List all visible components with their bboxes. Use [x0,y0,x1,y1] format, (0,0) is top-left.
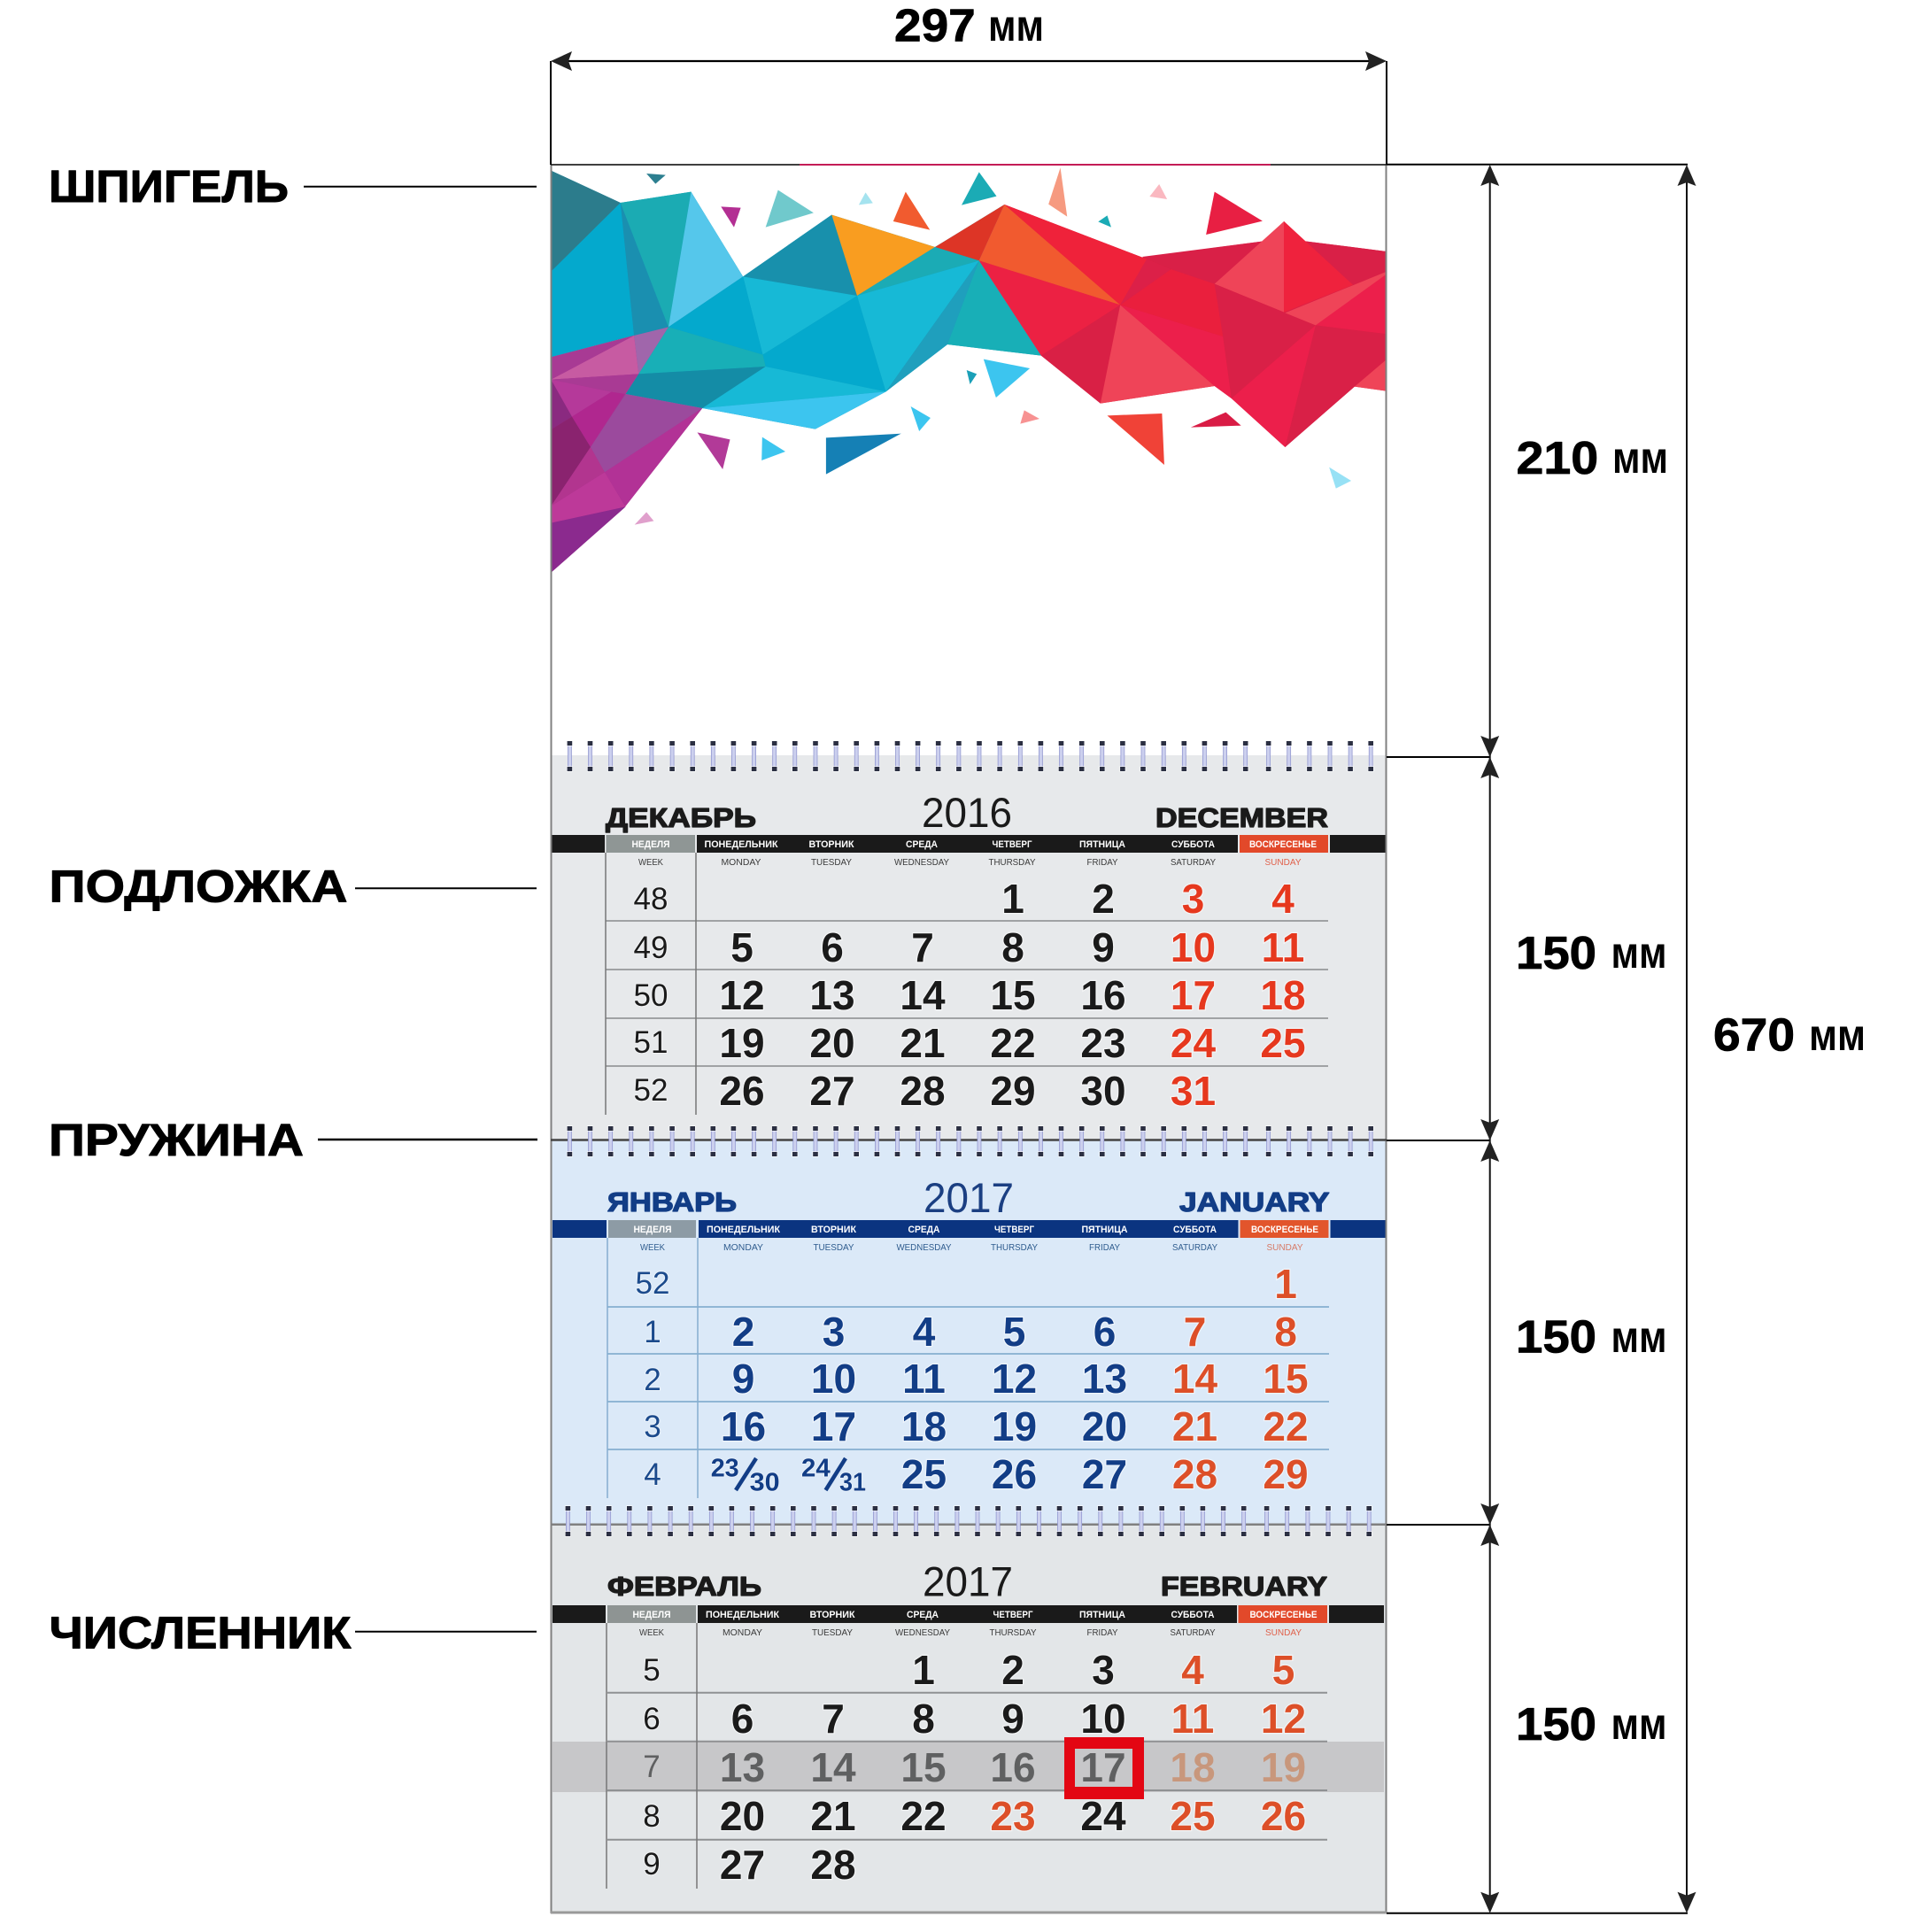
dates: 1 [912,1647,935,1693]
dates: 14 [1172,1356,1217,1402]
dates: 21 [1172,1403,1217,1449]
dates: 13 [1082,1356,1127,1402]
weekday sub-labels: WEDNESDAY [895,1628,950,1638]
dates: 4 [1181,1647,1204,1693]
dimension label: 150 mm January [1516,1312,1666,1364]
weekday sub-labels: TUESDAY [811,858,852,868]
grid lines [607,1238,1329,1498]
dimension label: 150 mm February: 150 [1516,1699,1596,1750]
dates: 24 [801,1454,831,1482]
weekday header bar: ВТОРНИК [809,839,854,850]
weekday header bar: ВТОРНИК [809,1610,855,1620]
dates: 7 [911,924,934,970]
dimension: width 297 mm: 297 [894,1,976,52]
heading: FEBRUARY: FEBRUARY [1161,1571,1327,1602]
dates: 28 [1172,1451,1217,1497]
dates: 20 [1082,1403,1127,1449]
dates: 8 [912,1696,935,1742]
dates: 2 [1001,1647,1024,1693]
dimension: width 297 mm [551,1,1387,165]
dates: 15 [1263,1356,1309,1402]
weekday sub-labels [639,1628,1302,1638]
weekday header bar: СРЕДА [908,1225,940,1235]
week numbers: 2 [644,1363,661,1397]
dates: 1 [1274,1261,1297,1307]
dates: 12 [992,1356,1037,1402]
dates: 26 [719,1068,765,1114]
weekday header bar: ПОНЕДЕЛЬНИК [705,839,778,850]
dates: 29 [990,1068,1036,1114]
panel: February [551,1526,1387,1913]
week numbers: 1 [644,1315,661,1349]
dates: 21 [900,1020,946,1066]
dimension label: 150 mm December: 150 [1516,928,1596,979]
dates: 25 [1170,1793,1216,1839]
dates: 3 [823,1309,845,1355]
dimension label: 150 mm February: мм [1611,1699,1666,1749]
week numbers: 3 [644,1410,661,1444]
panel: December [551,755,1387,1140]
dates: 31 [1171,1068,1216,1114]
dates: 27 [720,1842,765,1888]
weekday sub-labels: THURSDAY [991,1243,1038,1253]
dates: 4 [1271,876,1294,922]
dates: 24 [1080,1793,1126,1839]
weekday sub-labels: FRIDAY [1087,858,1118,868]
dates: 6 [731,1696,753,1742]
dates: 16 [1080,972,1126,1018]
spring: December binding [567,740,1374,772]
weekday sub-labels: SATURDAY [1171,858,1216,868]
dimension label: 150 mm January: 150 [1516,1312,1596,1364]
dates: 18 [1170,1744,1216,1790]
dates: 4 [913,1309,936,1355]
weekday sub-labels: SATURDAY [1172,1243,1217,1253]
weekday sub-labels: WEEK [638,858,663,868]
dimension label: 150 mm December: мм [1611,928,1666,978]
weekday header bar [553,1220,1385,1238]
weekday header bar: ПЯТНИЦА [1079,1610,1125,1620]
week numbers: 52 [634,1073,668,1108]
dates: 12 [719,972,765,1018]
dates: 1 [1001,876,1024,922]
dates: 11 [902,1356,946,1402]
week numbers: 50 [634,978,668,1013]
dates: 21 [810,1793,856,1839]
red date marker [1064,1737,1144,1799]
weekday sub-labels: TUESDAY [813,1243,854,1253]
weekday sub-labels: WEDNESDAY [896,1243,952,1253]
dates: 24 [1171,1020,1216,1066]
dates: 22 [1263,1403,1309,1449]
dates: 20 [720,1793,765,1839]
dates: 3 [1182,876,1204,922]
weekday header bar: ПЯТНИЦА [1082,1225,1128,1235]
weekday sub-labels [640,1243,1303,1253]
heading: ФЕВРАЛЬ: ФЕВРАЛЬ [607,1571,761,1602]
week numbers: 6 [643,1702,661,1736]
dates: 10 [811,1356,856,1402]
weekday header bar: НЕДЕЛЯ [634,1225,672,1235]
callout: ЧИСЛЕННИК: ЧИСЛЕННИК [50,1608,352,1658]
heading: DECEMBER: DECEMBER [1155,802,1328,833]
week numbers: 51 [634,1025,668,1060]
grid lines [606,853,1328,1115]
dates: 8 [1001,924,1024,970]
dates: 26 [1261,1793,1306,1839]
dates: 27 [1082,1451,1127,1497]
panel: header art (шпигель) [553,168,1385,572]
weekday header bar: СУББОТА [1173,1225,1217,1235]
dates: 11 [1171,1696,1214,1742]
weekday header bar: ВОСКРЕСЕНЬЕ [1249,839,1317,850]
heading: ЯНВАРЬ: ЯНВАРЬ [607,1186,737,1217]
callout: ПРУЖИНА: ПРУЖИНА [49,1115,304,1165]
weekday sub-labels: SUNDAY [1265,1628,1302,1638]
dates: 9 [1001,1696,1024,1742]
week numbers: 8 [643,1799,661,1834]
dates: 10 [1080,1696,1126,1742]
dates: 26 [992,1451,1037,1497]
week numbers: 48 [634,882,668,916]
callout: ПОДЛОЖКА: ПОДЛОЖКА [50,861,347,911]
heading: year 2016: 2016 [922,789,1012,836]
weekday header bar: СУББОТА [1171,839,1215,850]
weekday header bar [551,835,1386,853]
weekday header bar: НЕДЕЛЯ [632,1610,671,1620]
dates: 15 [900,1744,947,1790]
weekday sub-labels: TUESDAY [812,1628,853,1638]
weekday sub-labels: SUNDAY [1266,1243,1303,1253]
weekday sub-labels: MONDAY [723,1243,763,1253]
panel frame [551,165,1387,1913]
dates: 30 [750,1468,780,1496]
heading: year 2017: 2017 [923,1558,1013,1604]
dates: 29 [1263,1451,1309,1497]
dates: 23 [1080,1020,1126,1066]
dimension label: 210 mm [1516,433,1668,484]
week numbers: 9 [643,1847,661,1882]
dates: 28 [810,1842,856,1888]
dates: 12 [1261,1696,1306,1742]
dates [720,1647,1306,1888]
dimension label: 670 mm total [1713,1010,1866,1062]
weekday header bar: ВОСКРЕСЕНЬЕ [1250,1610,1318,1620]
weekday header bar: ЧЕТВЕРГ [994,1225,1035,1235]
weekday header bar: НЕДЕЛЯ [632,839,670,850]
dates: 20 [809,1020,855,1066]
weekday sub-labels: FRIDAY [1089,1243,1120,1253]
dates: 16 [990,1744,1036,1790]
weekday header bar: ЧЕТВЕРГ [992,839,1032,850]
dates: 7 [1184,1309,1206,1355]
weekday header bar: ПОНЕДЕЛЬНИК [706,1610,779,1620]
dates: 27 [809,1068,855,1114]
weekday sub-labels: SUNDAY [1264,858,1302,868]
weekday header bar: СРЕДА [907,1610,939,1620]
dates: 10 [1171,924,1216,970]
dates [719,876,1306,1114]
weekday header bar: ВОСКРЕСЕНЬЕ [1251,1225,1318,1235]
dates: 23 [711,1454,739,1482]
grid lines [607,1623,1327,1889]
dates: 13 [809,972,855,1018]
weekday header bar: ПЯТНИЦА [1079,839,1125,850]
week numbers [643,1653,661,1882]
dates: 13 [720,1744,765,1790]
weekday sub-labels: THURSDAY [988,858,1036,868]
dimension label: 150 mm February [1516,1699,1666,1750]
dates: 30 [1080,1068,1126,1114]
dates: 18 [901,1403,947,1449]
dates: 6 [821,924,844,970]
weekday sub-labels: MONDAY [723,1628,762,1638]
dates: 9 [1092,924,1115,970]
dates: 18 [1260,972,1306,1018]
dates: 14 [810,1744,856,1790]
dates: 28 [900,1068,946,1114]
heading: ДЕКАБРЬ: ДЕКАБРЬ [606,802,756,833]
dates: 2 [1092,876,1115,922]
weekday sub-labels: MONDAY [721,858,761,868]
dates: 23 [990,1793,1036,1839]
dimension label: 150 mm January: мм [1611,1312,1666,1362]
weekday sub-labels: FRIDAY [1087,1628,1118,1638]
dates: 19 [992,1403,1037,1449]
weekday header bar [553,1605,1384,1623]
spring: February binding [565,1505,1372,1537]
week numbers: 49 [634,931,668,965]
weekday sub-labels: WEEK [639,1628,664,1638]
weekday header bar: СУББОТА [1171,1610,1215,1620]
dates: 25 [1260,1020,1306,1066]
dates: 15 [990,972,1036,1018]
dates: 19 [719,1020,765,1066]
dates: 5 [1272,1647,1294,1693]
spring: January binding [567,1125,1374,1157]
weekday header bar: ЧЕТВЕРГ [993,1610,1033,1620]
weekday sub-labels: WEDNESDAY [894,858,949,868]
dates: 17 [1171,972,1216,1018]
weekday sub-labels [638,858,1302,868]
dates: 11 [1262,924,1304,970]
week numbers [634,882,668,1108]
weekday sub-labels: THURSDAY [990,1628,1037,1638]
dates: 14 [900,972,946,1018]
dates: 8 [1274,1309,1297,1355]
dates: 9 [732,1356,754,1402]
weekday sub-labels: SATURDAY [1171,1628,1216,1638]
dates: 3 [1092,1647,1115,1693]
panel: January [551,1140,1387,1525]
week numbers: 4 [644,1457,661,1492]
weekday sub-labels: WEEK [640,1243,665,1253]
week numbers: 52 [636,1266,669,1301]
week numbers: 5 [643,1653,661,1688]
heading: JANUARY: JANUARY [1179,1186,1330,1217]
dates: 22 [990,1020,1036,1066]
dates: 19 [1261,1744,1306,1790]
dates: 6 [1094,1309,1116,1355]
dates: 5 [1003,1309,1025,1355]
dates: 22 [900,1793,947,1839]
dimension lines: height segments [1387,165,1696,1913]
dates: 17 [1080,1744,1126,1790]
dimension: width 297 mm: мм [988,1,1044,50]
dimension label: 210 mm: 210 [1516,433,1598,484]
dates [711,1261,1309,1497]
week numbers: 7 [643,1750,661,1784]
dates: 31 [839,1468,866,1496]
dimension label: 150 mm December [1516,928,1666,979]
weekday header bar: СРЕДА [906,839,938,850]
polygon artwork [551,167,1387,573]
callout: ШПИГЕЛЬ: ШПИГЕЛЬ [49,161,289,212]
dates: 25 [901,1451,947,1497]
week numbers [636,1266,669,1492]
heading: year 2017: 2017 [923,1174,1014,1221]
weekday header bar: ВТОРНИК [811,1225,856,1235]
highlighted week band [553,1742,1384,1792]
dates: 16 [721,1403,766,1449]
weekday header bar: ПОНЕДЕЛЬНИК [707,1225,780,1235]
dimension label: 670 mm total: 670 [1713,1010,1795,1062]
dates: 2 [732,1309,754,1355]
dimension label: 210 mm: мм [1612,433,1668,483]
dates: 7 [822,1696,845,1742]
dates: 17 [811,1403,856,1449]
dates: 5 [730,924,753,970]
dimension label: 670 mm total: мм [1809,1010,1866,1060]
